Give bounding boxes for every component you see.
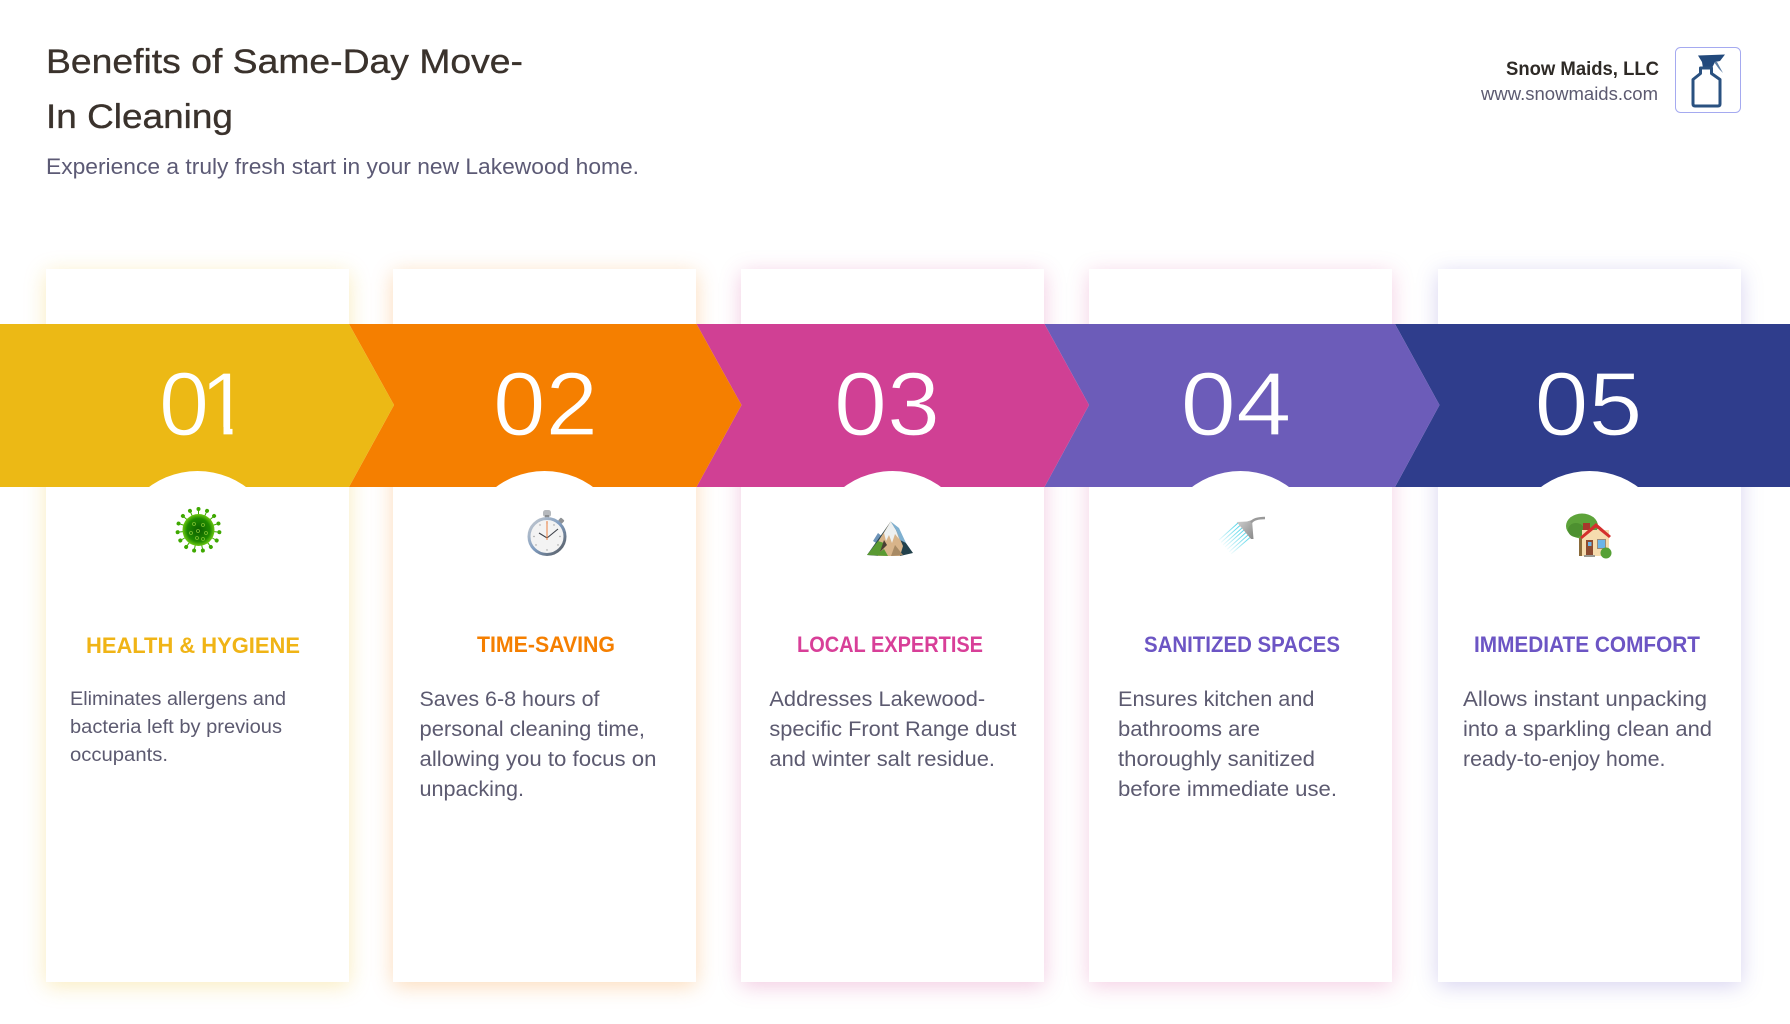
heading: IMMEDIATE COMFORT <box>1474 632 1700 657</box>
body text: unpacking. <box>420 778 524 801</box>
icon: shower head <box>1219 518 1265 554</box>
body text: allowing you to focus on <box>420 748 656 771</box>
company name: Snow Maids, LLC <box>1506 58 1659 80</box>
chevron 04: 04 <box>1180 355 1292 455</box>
chevron 05 <box>1395 324 1790 487</box>
body text: occupants. <box>70 745 168 766</box>
logo: spray bottle <box>1676 48 1740 112</box>
heading: TIME-SAVING <box>477 632 615 657</box>
header: title and subtitle <box>46 43 639 179</box>
body text: thoroughly sanitized <box>1118 748 1315 771</box>
circle notch <box>116 471 280 635</box>
body text <box>1118 688 1337 801</box>
body text <box>70 689 286 766</box>
circle notch <box>1158 471 1322 635</box>
heading: SANITIZED SPACES <box>1144 632 1340 657</box>
heading: LOCAL EXPERTISE <box>797 632 983 657</box>
chevron 01: 01 <box>159 355 250 455</box>
heading: HEALTH & HYGIENE <box>86 633 300 658</box>
icon: virus <box>176 508 221 552</box>
body text: and winter salt residue. <box>769 748 995 771</box>
chevron 03 <box>696 324 1089 487</box>
body text: bacteria left by previous <box>70 717 282 738</box>
body text: Saves 6-8 hours of <box>420 688 600 711</box>
circle notch <box>1508 471 1672 635</box>
chevron 02: 02 <box>493 355 598 455</box>
chevron 04 <box>1044 324 1440 487</box>
body text: Ensures kitchen and <box>1118 688 1314 711</box>
circle notch <box>462 471 626 635</box>
panel: immediate comfort <box>1438 269 1741 982</box>
title <box>46 43 523 136</box>
body text: into a sparkling clean and <box>1463 718 1712 741</box>
chevron 01 <box>0 324 394 487</box>
body text <box>769 688 1017 771</box>
circle notch <box>810 471 974 635</box>
icon: stopwatch <box>529 510 565 554</box>
body text: before immediate use. <box>1118 778 1337 801</box>
website: www.snowmaids.com <box>1480 84 1658 104</box>
subtitle: Experience a truly fresh start in your new Lakewood home. <box>46 154 639 179</box>
body text: ready-to-enjoy home. <box>1463 748 1666 771</box>
panel: sanitized spaces <box>1089 269 1392 982</box>
body text: personal cleaning time, <box>420 718 645 741</box>
title: In Cleaning <box>46 98 233 136</box>
body text: specific Front Range dust <box>769 718 1017 741</box>
body text <box>420 688 656 801</box>
chevron 03: 03 <box>834 355 940 455</box>
title: Benefits of Same-Day Move- <box>46 43 523 81</box>
body text: Eliminates allergens and <box>70 689 286 710</box>
chevron 05: 05 <box>1534 355 1642 455</box>
panel: time-saving <box>393 269 696 982</box>
icon: house with tree <box>1566 514 1612 558</box>
brand block: company name, website and logo <box>1480 48 1740 112</box>
body text: Addresses Lakewood- <box>769 688 985 711</box>
icon: mountain <box>867 522 913 556</box>
body text: Allows instant unpacking <box>1463 688 1707 711</box>
body text: bathrooms are <box>1118 718 1260 741</box>
panel: local expertise <box>741 269 1044 982</box>
body text <box>1463 688 1712 771</box>
panel: health and hygiene <box>46 269 349 982</box>
chevron 02 <box>349 324 742 487</box>
ribbon: five numbered chevrons <box>0 324 1790 487</box>
